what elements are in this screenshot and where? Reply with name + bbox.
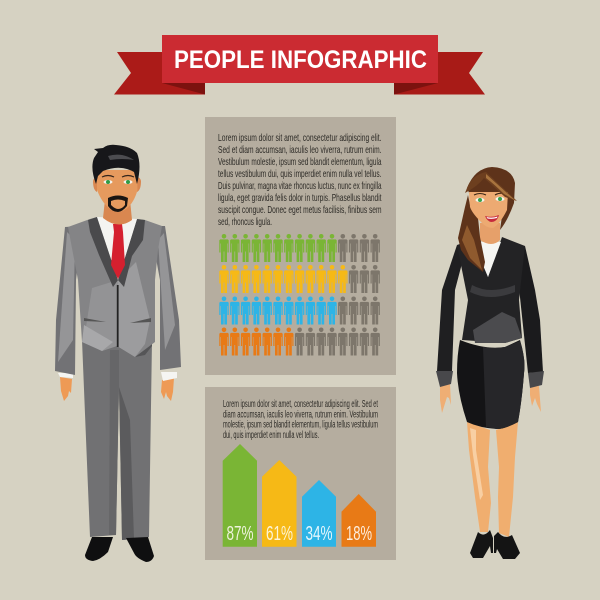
goatee: [108, 196, 128, 212]
legs: [467, 422, 491, 532]
skirt: [457, 340, 524, 429]
hair: [92, 145, 140, 184]
text block: chart description: molestie, ipsum sed blandit elementum, ligula tellus vestibulum: [223, 420, 378, 430]
panel: arrow chart: [205, 387, 396, 560]
text block: lorem ipsum paragraph: suscipit congue. Donec eget metus facilisis, finibus sem: [218, 205, 382, 216]
text block: lorem ipsum paragraph: Sed et diam accumsan, iaculis leo viverra, rutrum enim.: [218, 145, 382, 156]
eyes: [476, 198, 484, 202]
shirt and tie: [97, 217, 137, 280]
title ribbon: [114, 35, 485, 94]
blouse: [480, 242, 501, 277]
face: [97, 170, 138, 212]
jacket body: [68, 217, 162, 357]
pictogram row: blue: [219, 296, 380, 324]
arrow bar: 34%: [302, 480, 336, 547]
arrow bar: 87%: [223, 444, 257, 547]
hair back: [467, 167, 515, 230]
text block: chart description: [223, 399, 378, 441]
hands: [60, 377, 72, 401]
arrow bar: 34%: 34%: [306, 522, 332, 545]
text block: lorem ipsum paragraph: Vestibulum molestie, ipsum sed blandit elementum, ligula: [218, 157, 382, 168]
text block: lorem ipsum paragraph: Lorem ipsum dolor sit amet, consectetur adipiscing elit.: [218, 133, 382, 144]
trousers: [82, 340, 152, 540]
arrow bar: 18%: [342, 494, 376, 547]
text block: lorem ipsum paragraph: tellus vestibulum dui, quis imperdiet enim nulla vel tellus.: [218, 169, 382, 180]
ponytail: [458, 195, 485, 272]
text block: chart description: dui, quis imperdiet enim nulla vel tellus.: [223, 430, 319, 441]
text block: lorem ipsum paragraph: sed, rhoncus ligula.: [218, 217, 272, 228]
panel: text and pictograms: [205, 117, 396, 375]
title: PEOPLE INFOGRAPHIC: [174, 46, 427, 74]
cuffs: [58, 373, 73, 378]
eyes: [104, 180, 112, 184]
jacket: [457, 237, 525, 343]
figure: businessman: [55, 145, 181, 562]
cuffs: [436, 371, 453, 387]
arrow bar: 61%: 61%: [266, 522, 293, 545]
lapels: [88, 217, 118, 287]
text block: chart description: Lorem ipsum dolor sit amet, consectetur adipiscing elit. Sed et: [223, 399, 378, 410]
pictogram row: green: [219, 234, 380, 262]
pictogram row: orange: [219, 328, 380, 356]
hands: [440, 384, 451, 413]
mouth: [485, 215, 499, 222]
hair fringe: [465, 172, 517, 201]
neck: [480, 223, 500, 244]
ears: [93, 177, 141, 192]
shoes: [85, 537, 113, 561]
arrow bar: 61%: [262, 460, 296, 547]
text block: lorem ipsum paragraph: ligula, eget gravida felis dolor in turpis. Phasellus blandit: [218, 193, 382, 204]
arms: [55, 226, 82, 375]
text block: lorem ipsum paragraph: [218, 133, 382, 228]
neck: [103, 200, 132, 225]
arms: [437, 245, 466, 371]
figure: businesswoman: [436, 167, 544, 559]
arrow bar: 87%: 87%: [226, 522, 254, 545]
shoes: [470, 530, 493, 558]
text block: chart description: diam accumsan, iaculis leo viverra, rutrum enim. Vestibulum: [223, 410, 378, 420]
arrow bar: 18%: 18%: [346, 522, 372, 545]
text block: lorem ipsum paragraph: Duis pulvinar, magna vitae rhoncus luctus, nunc ex fringilla: [218, 181, 382, 192]
face: [469, 192, 508, 228]
pictogram row: yellow: [219, 265, 380, 293]
